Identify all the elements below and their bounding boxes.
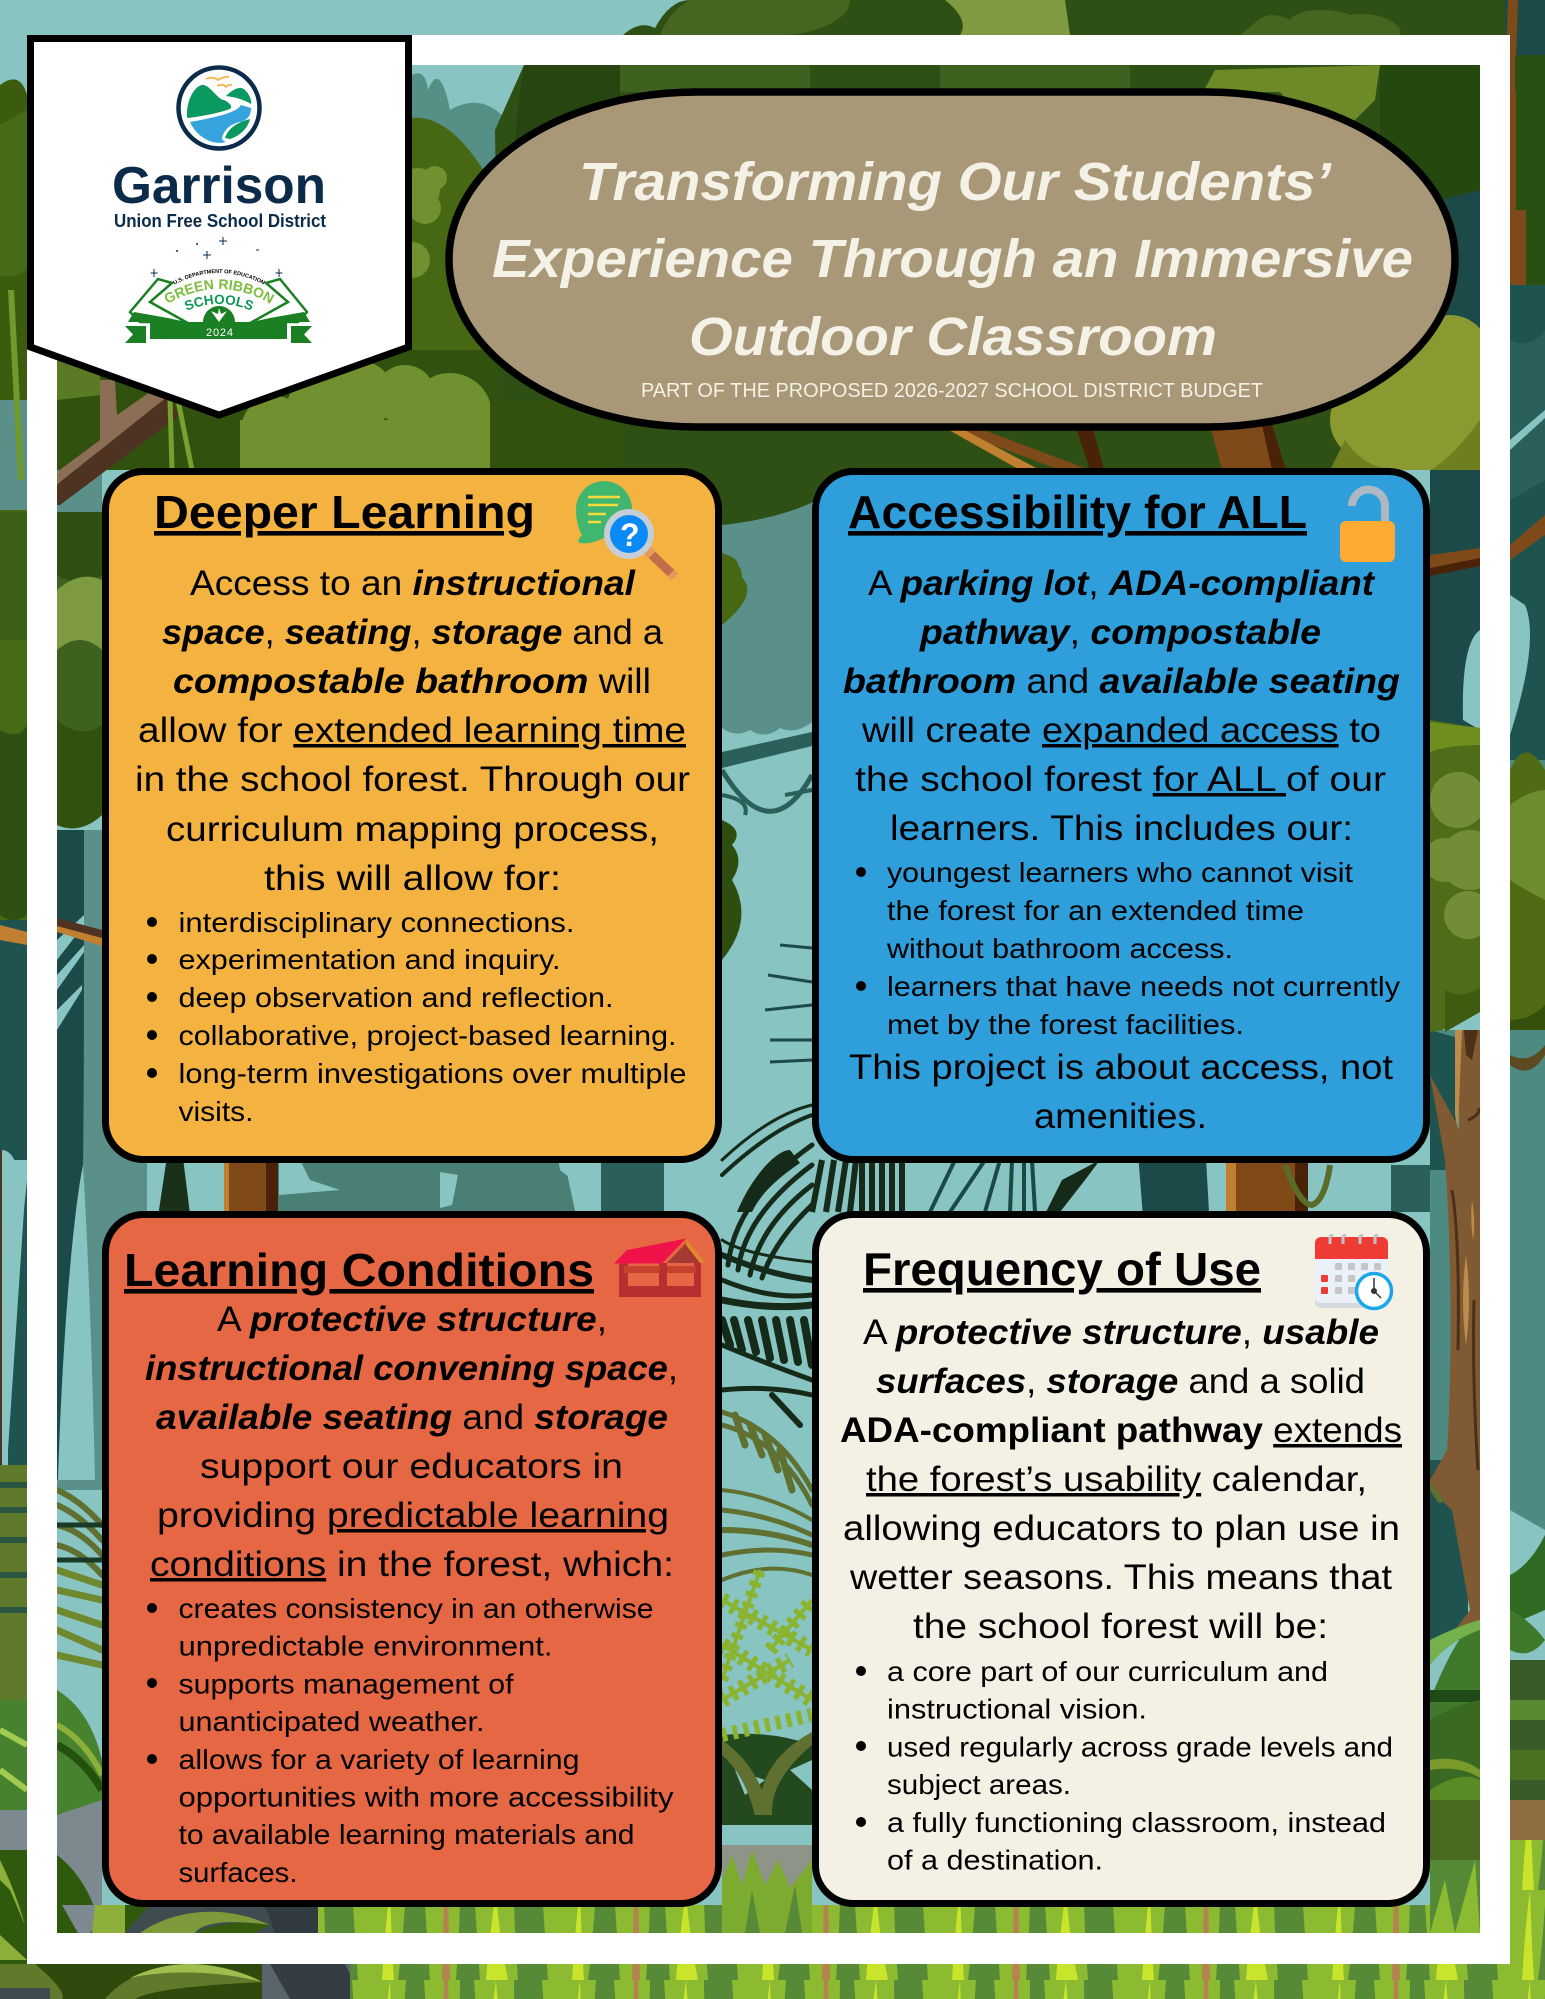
heading: Learning Conditions: Learning Conditions — [124, 1244, 594, 1296]
title text — [492, 152, 1413, 367]
body text: A protective structure , — [217, 1300, 607, 1339]
bullet list: long-term investigations over multiple — [178, 1058, 686, 1089]
body text: in the school forest. Through our — [135, 760, 690, 799]
body text: curriculum mapping process, — [166, 810, 659, 849]
right side dark teal and branches — [1430, 470, 1480, 728]
body text: wetter seasons. This means that — [849, 1558, 1392, 1597]
bullet list: interdisciplinary connections. — [178, 907, 574, 938]
bullet list: instructional vision. — [887, 1694, 1147, 1725]
title text: Outdoor Classroom — [689, 307, 1217, 367]
body text: A protective structure , usable — [863, 1313, 1379, 1352]
title text: Experience Through an Immersive — [492, 229, 1413, 289]
icon: speech bubble and magnifier — [576, 481, 675, 577]
body text: the school forest for ALL of our — [855, 760, 1386, 799]
body text: allowing educators to plan use in — [843, 1509, 1400, 1548]
bullet list — [147, 1593, 674, 1888]
body text: compostable bathroom will — [173, 662, 651, 701]
upper foliage — [57, 350, 499, 470]
closing statement — [849, 1048, 1393, 1136]
body text — [145, 1300, 678, 1584]
bullet list: used regularly across grade levels and — [887, 1731, 1393, 1762]
body text: providing predictable learning — [157, 1496, 669, 1535]
bullet list: without bathroom access. — [886, 933, 1233, 964]
body text — [135, 564, 690, 898]
body text — [843, 564, 1400, 848]
bullet list: the forest for an extended time — [887, 895, 1304, 926]
fern in centre gap — [722, 1570, 812, 1735]
olive palm fronds — [57, 1412, 1440, 1665]
panel: Accessibility for ALL — [816, 472, 1426, 1160]
icon: calendar and clock — [1315, 1235, 1392, 1308]
olive bush top right — [1330, 315, 1480, 470]
bullet list: to available learning materials and — [178, 1819, 634, 1850]
bullet list: opportunities with more accessibility — [178, 1782, 674, 1812]
title text: Transforming Our Students’ — [579, 152, 1332, 212]
body text: the school forest will be: — [913, 1607, 1328, 1646]
bullet list: surfaces. — [178, 1857, 298, 1888]
body text: space, seating, storage and a — [162, 613, 664, 652]
bullet list: youngest learners who cannot visit — [887, 857, 1353, 888]
icon: speech bubble and magnifier: ? — [620, 517, 640, 553]
badge: Green Ribbon Schools — [125, 237, 312, 343]
body text: ADA-compliant pathway extends — [840, 1411, 1402, 1450]
logo shield — [27, 35, 412, 419]
bullet list: met by the forest facilities. — [887, 1009, 1244, 1040]
body text: A parking lot , ADA-compliant — [868, 564, 1375, 603]
body text: Access to an instructional — [190, 564, 636, 603]
body text: available seating and storage — [156, 1398, 668, 1437]
icon: red-roofed shelter — [614, 1238, 705, 1297]
bullet list: of a destination. — [887, 1844, 1103, 1876]
body text: will create expanded access to — [861, 711, 1381, 750]
bamboo by shield — [170, 400, 192, 470]
left lower leaves and rock — [57, 1690, 102, 1815]
heading: Deeper Learning: Deeper Learning — [154, 486, 535, 538]
logo wordmark: Garrison: Garrison — [112, 157, 326, 215]
right tree trunk — [1430, 1030, 1480, 1630]
bullet list: supports management of — [178, 1668, 514, 1699]
body text: bathroom and available seating — [843, 662, 1400, 701]
panel: Deeper Learning — [106, 472, 718, 1160]
bullet list: a fully functioning classroom, instead — [887, 1807, 1386, 1838]
body text: conditions in the forest, which: — [150, 1545, 674, 1584]
bullet list: creates consistency in an otherwise — [178, 1593, 654, 1624]
bullet list: collaborative, project-based learning. — [178, 1020, 676, 1051]
body text: instructional convening space , — [145, 1349, 678, 1388]
icon: Garrison river logo — [178, 68, 260, 148]
dark palm fronds — [722, 1105, 812, 1425]
bullet list: allows for a variety of learning — [178, 1744, 580, 1775]
body text: surfaces, storage and a solid — [876, 1362, 1365, 1401]
body text — [840, 1313, 1402, 1646]
branches under title — [966, 430, 1084, 468]
bullet list — [147, 907, 686, 1127]
panel: Frequency of Use — [816, 1214, 1426, 1904]
badge: Green Ribbon Schools: U.S. DEPARTMENT OF EDUCATION — [173, 269, 265, 284]
body text: pathway , compostable — [919, 613, 1321, 652]
bullet list — [856, 1656, 1393, 1876]
bullet list: visits. — [178, 1096, 254, 1127]
bullet list: unanticipated weather. — [178, 1706, 484, 1737]
bullet list: subject areas. — [887, 1769, 1071, 1800]
heading: Accessibility for ALL: Accessibility for ALL — [848, 486, 1307, 538]
body text: this will allow for: — [264, 859, 561, 898]
left lower bush and limb — [57, 470, 102, 512]
heading: Frequency of Use: Frequency of Use — [863, 1243, 1261, 1295]
icon: open padlock — [1340, 490, 1395, 562]
badge: Green Ribbon Schools: SCHOOLS — [184, 294, 254, 310]
panel: Learning Conditions — [106, 1214, 718, 1904]
leaves on right side — [1430, 1620, 1480, 1720]
badge: Green Ribbon Schools: GREEN RIBBON — [164, 279, 274, 304]
ground rocks — [90, 1907, 275, 1933]
closing statement: amenities. — [1034, 1097, 1207, 1136]
title banner — [449, 92, 1455, 427]
right bush — [1430, 720, 1480, 1032]
bullet list: experimentation and inquiry. — [178, 944, 560, 975]
bullet list: deep observation and reflection. — [178, 982, 614, 1013]
bullet list: learners that have needs not currently — [887, 971, 1400, 1002]
closing statement: This project is about access, not — [849, 1048, 1393, 1087]
body text: support our educators in — [200, 1447, 623, 1486]
bullet list: a core part of our curriculum and — [887, 1656, 1328, 1687]
badge: Green Ribbon Schools: 2024 — [206, 327, 233, 339]
grass — [318, 1905, 1480, 1933]
centre gap teal canopy and vine — [722, 480, 812, 735]
logo subtitle: Union Free School District — [114, 211, 326, 231]
body text: the forest’s usability calendar, — [866, 1460, 1367, 1499]
body text: learners. This includes our: — [890, 809, 1353, 848]
dark band behind fern — [722, 1734, 812, 1825]
subtitle: PART OF THE PROPOSED 2026-2027 SCHOOL DISTRICT BUDGET — [641, 380, 1263, 402]
body text: allow for extended learning time — [138, 711, 686, 750]
bullet list: unpredictable environment. — [178, 1631, 552, 1662]
distant columns — [57, 830, 147, 1490]
bullet list — [856, 857, 1400, 1040]
